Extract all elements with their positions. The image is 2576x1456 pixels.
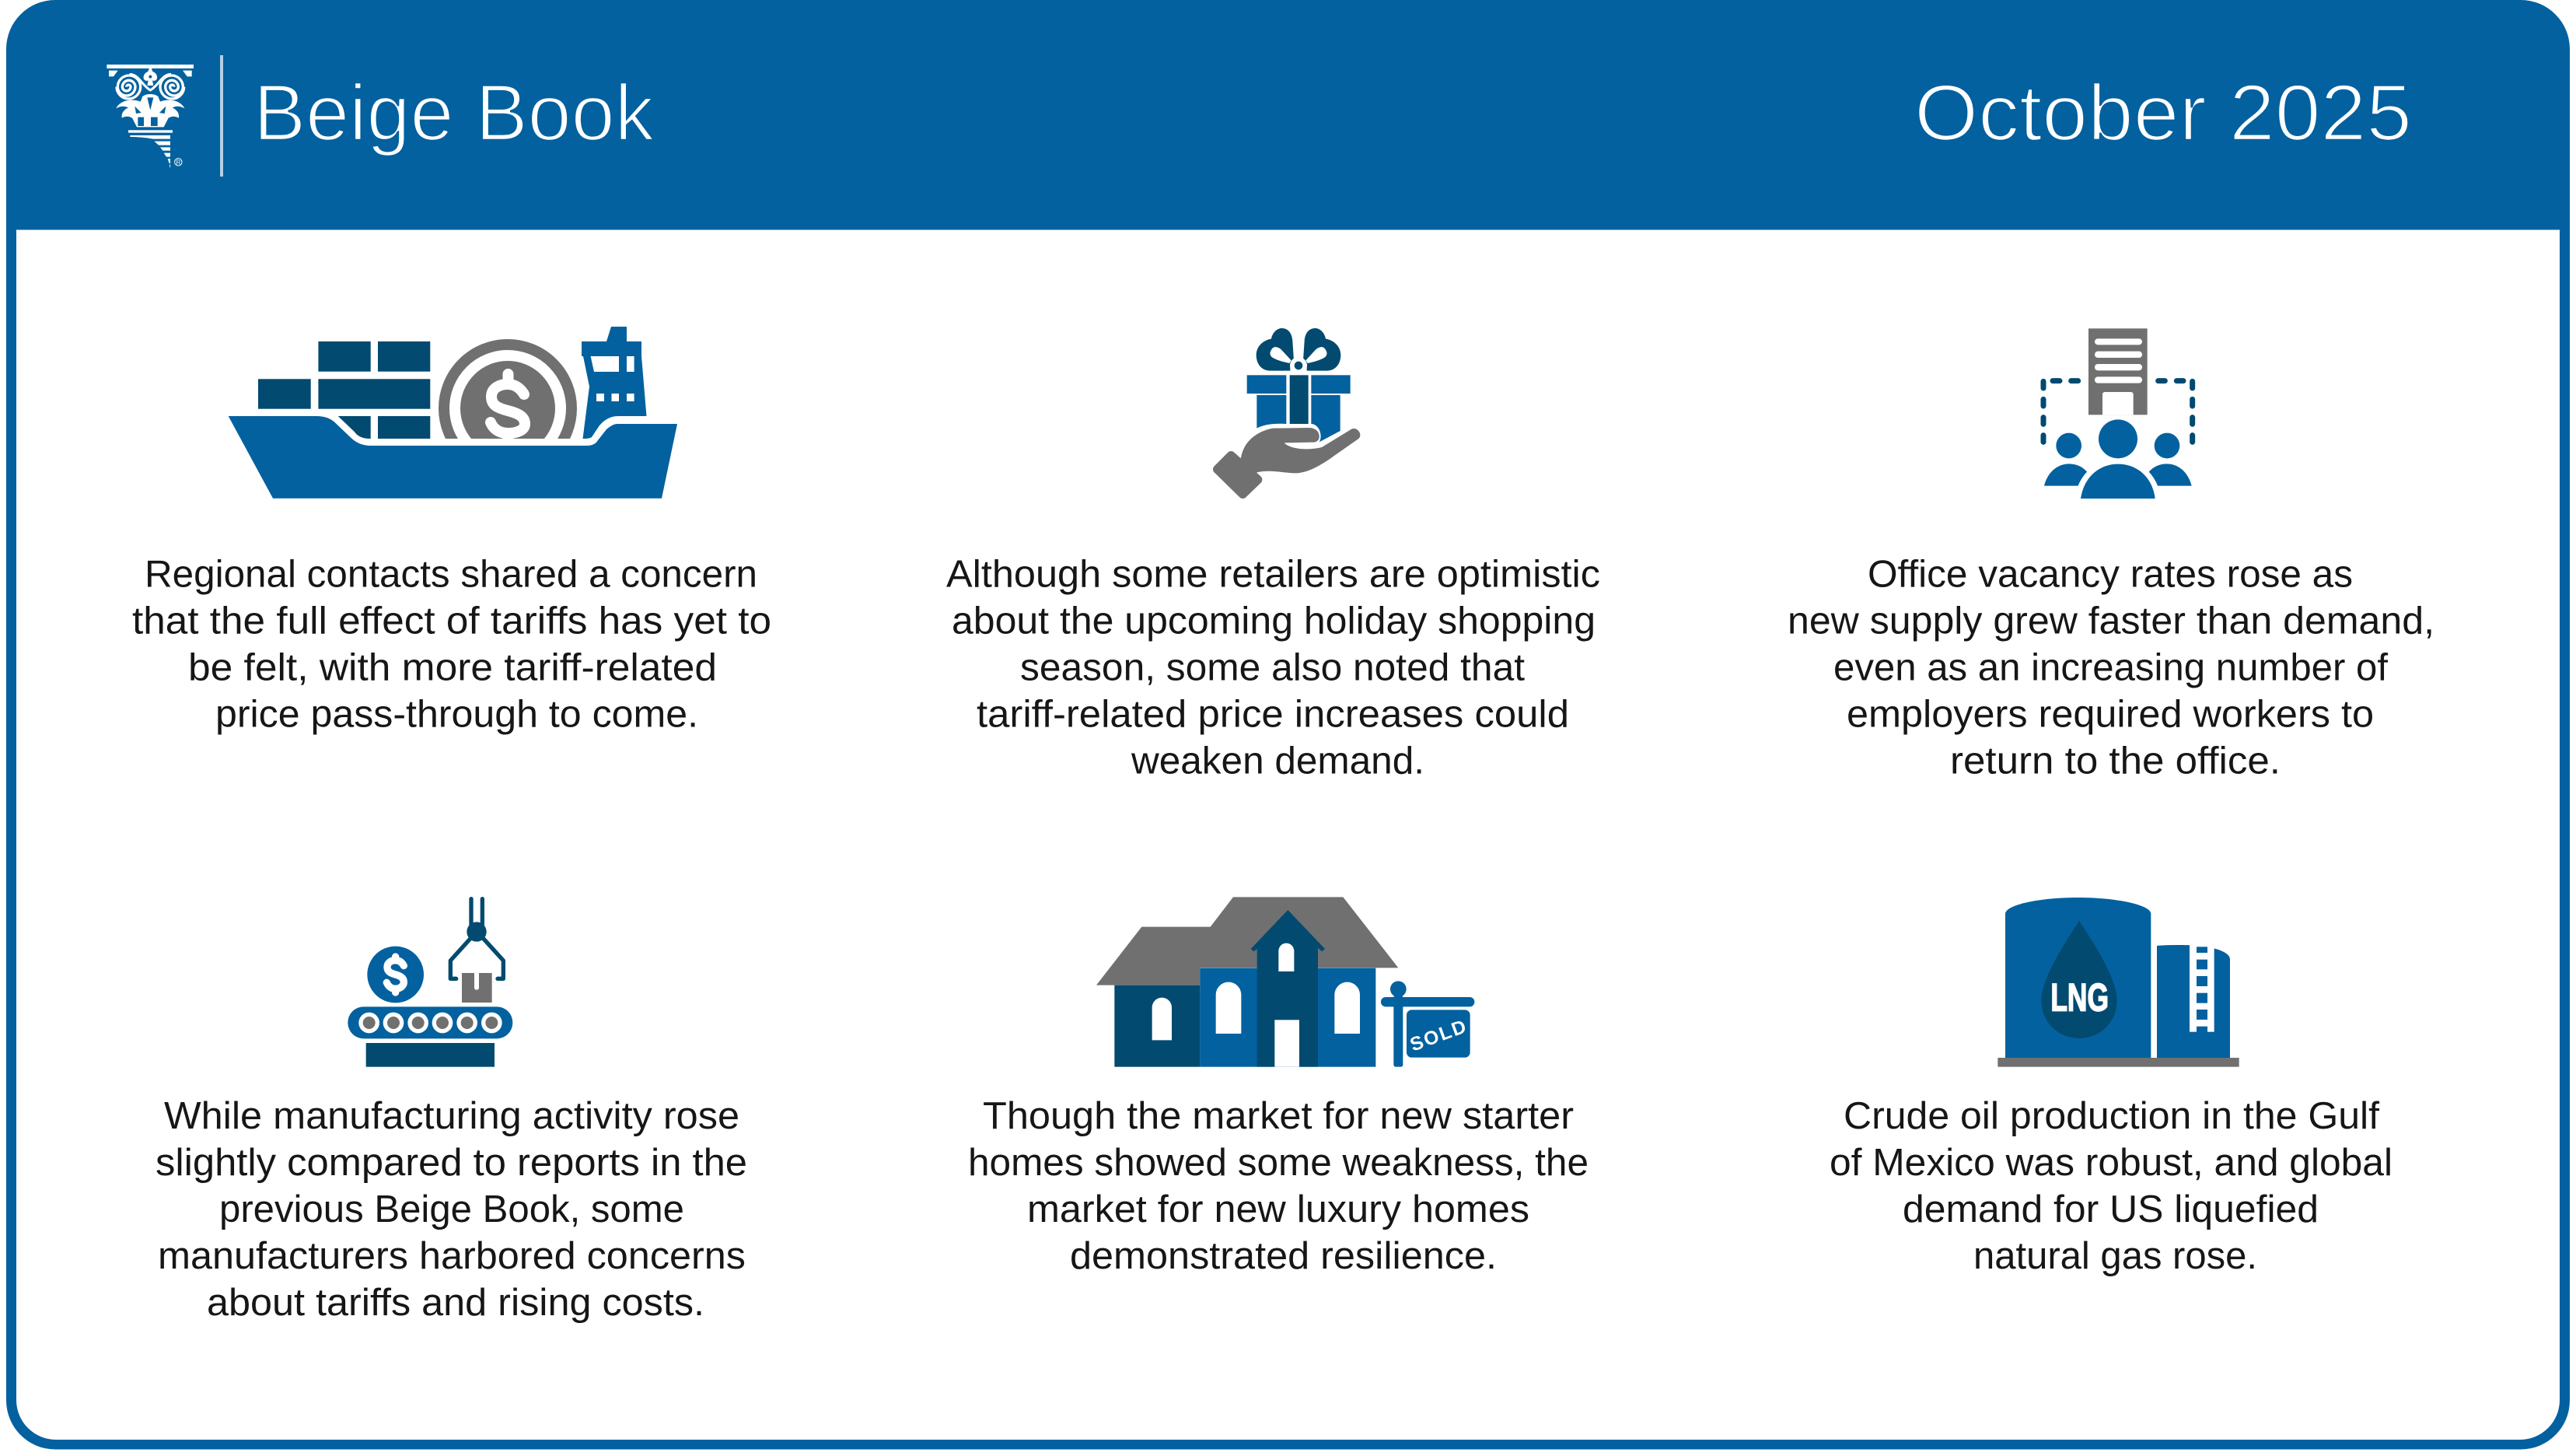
text: tariffs: price pass-through to come. <box>215 694 698 736</box>
text: energy: of Mexico was robust, and global <box>1830 1142 2392 1184</box>
icon: Corinthian column logo: R <box>176 159 180 166</box>
icon: cargo ship with coin <box>229 327 677 499</box>
panel: housing <box>968 897 1589 1277</box>
text: housing: Though the market for new starter <box>983 1095 1574 1137</box>
header divider line <box>220 55 223 177</box>
text: manufacturing: manufacturers harbored concerns <box>158 1235 746 1277</box>
text: manufacturing: While manufacturing activity rose <box>164 1095 739 1137</box>
text: retail: tariff-related price increases could <box>977 694 1569 736</box>
text: tariffs: Regional contacts shared a concern <box>145 554 757 596</box>
icon: LNG storage tanks: LNG <box>2050 975 2109 1019</box>
icon: house with sold sign: SOLD <box>1407 1016 1470 1055</box>
text: housing <box>968 1095 1589 1277</box>
text: office: even as an increasing number of <box>1833 647 2388 689</box>
text: retail: about the upcoming holiday shopping <box>952 600 1596 642</box>
text: retail: season, some also noted that <box>1020 647 1525 689</box>
text: office: employers required workers to <box>1847 694 2374 736</box>
text: manufacturing: about tariffs and rising costs. <box>207 1282 704 1324</box>
text: tariffs: be felt, with more tariff-related <box>188 647 717 689</box>
icon: office building and workers <box>2043 328 2193 499</box>
text: housing: homes showed some weakness, the <box>968 1142 1589 1184</box>
icon: LNG storage tanks <box>1998 898 2239 1067</box>
text: retail: Although some retailers are optimistic <box>946 554 1600 596</box>
text: retail <box>946 554 1600 782</box>
text: manufacturing: slightly compared to reports in the <box>156 1142 747 1184</box>
title: Beige Book: Beige Book <box>253 68 655 157</box>
text: tariffs <box>132 554 771 736</box>
text: manufacturing <box>156 1095 747 1324</box>
text: energy: Crude oil production in the Gulf <box>1844 1095 2379 1137</box>
panel: retail <box>946 328 1600 782</box>
panel: office <box>1788 328 2434 782</box>
text: energy <box>1830 1095 2392 1277</box>
icon: gift on hand <box>1218 328 1360 494</box>
text: office: return to the office. <box>1950 740 2281 782</box>
text: energy: demand for US liquefied <box>1903 1188 2319 1230</box>
text: office: new supply grew faster than demand, <box>1788 600 2434 642</box>
text: office: Office vacancy rates rose as <box>1868 554 2353 596</box>
date: October 2025: October 2025 <box>1914 68 2412 157</box>
icon: conveyor belt with coin and robotic claw <box>348 899 512 1067</box>
icon: house with sold sign <box>1096 897 1474 1067</box>
text: energy: natural gas rose. <box>1973 1235 2257 1277</box>
text: manufacturing: previous Beige Book, some <box>219 1188 684 1230</box>
panel: tariffs <box>132 327 771 736</box>
text: retail: weaken demand. <box>1131 740 1424 782</box>
icon: Corinthian column logo <box>107 65 194 167</box>
text: housing: demonstrated resilience. <box>1070 1235 1497 1277</box>
text: housing: market for new luxury homes <box>1027 1188 1529 1230</box>
text: tariffs: that the full effect of tariffs has yet to <box>132 600 771 642</box>
panel: manufacturing <box>156 899 747 1324</box>
panel: energy <box>1830 898 2392 1277</box>
text: office <box>1788 554 2434 782</box>
